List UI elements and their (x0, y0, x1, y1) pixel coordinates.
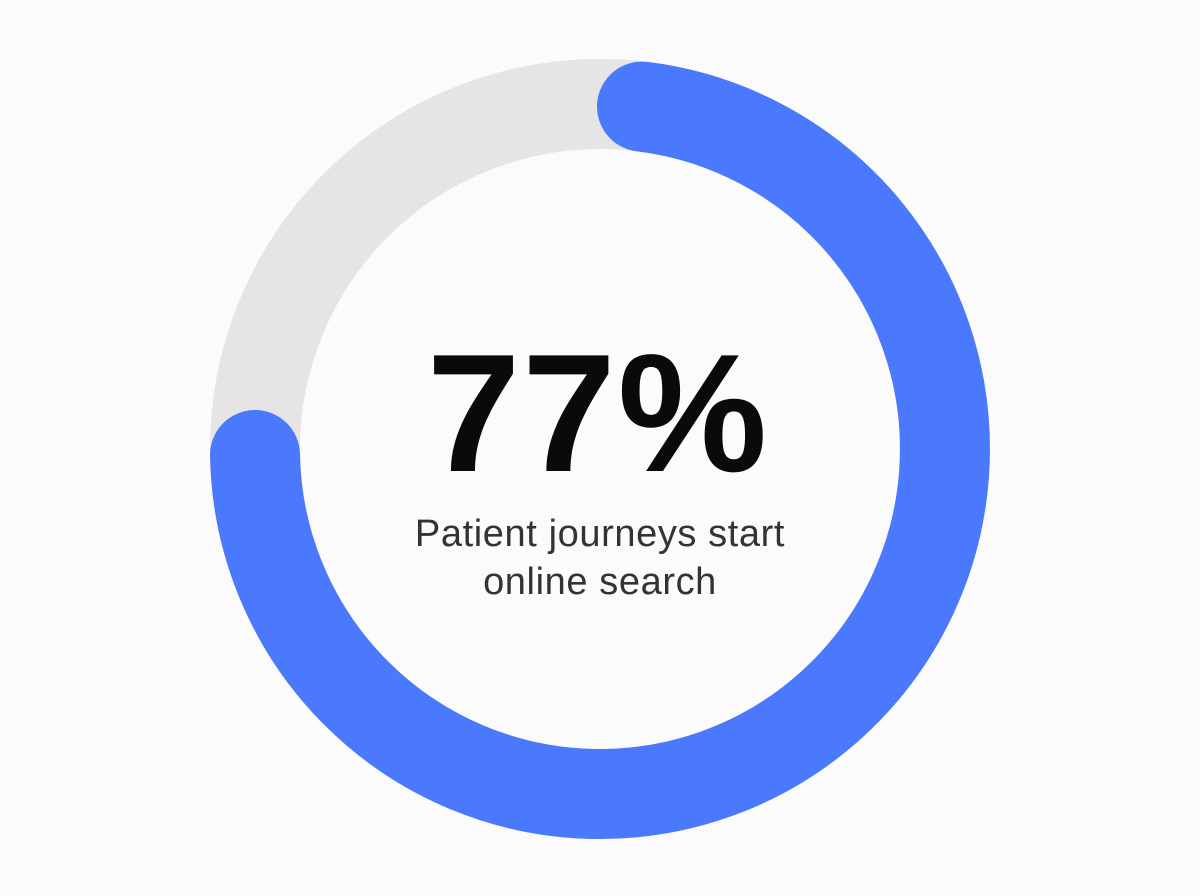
caption (415, 513, 785, 603)
progress arc 77% (255, 107, 945, 794)
caption: Patient journeys start (415, 513, 785, 555)
caption: online search (483, 561, 717, 603)
big number: 77% (427, 319, 769, 507)
track ring (255, 104, 945, 794)
